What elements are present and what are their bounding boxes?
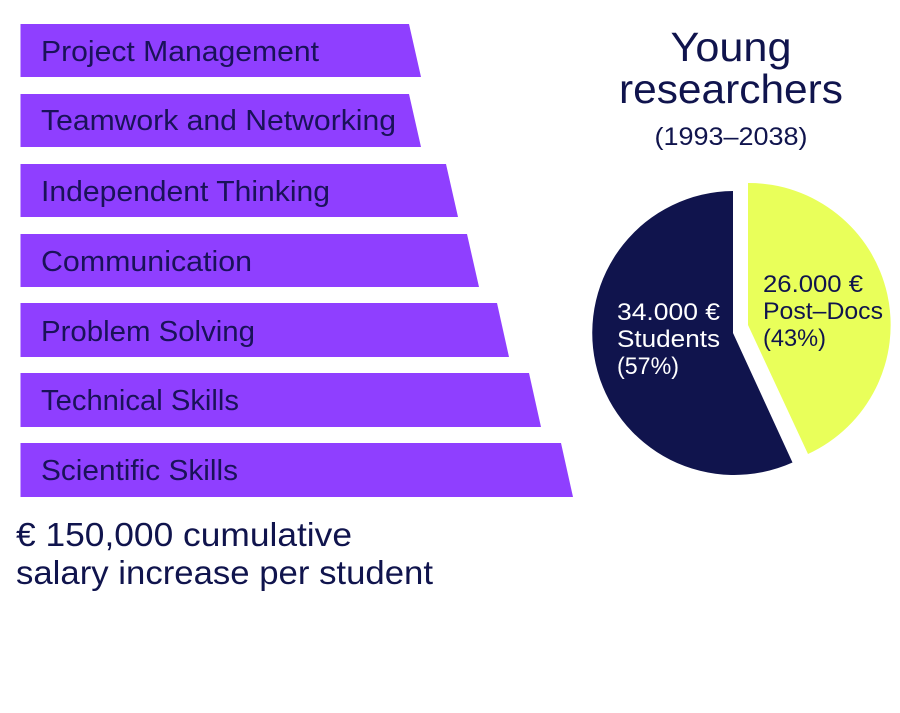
pie slice: students: Students bbox=[617, 326, 720, 353]
bar: Project Management: Project Management bbox=[41, 36, 319, 68]
title: Young researchers: Young bbox=[670, 24, 792, 70]
pie slice: post-docs bbox=[748, 183, 891, 454]
bar: Scientific Skills bbox=[20, 443, 573, 497]
bar: Technical Skills: Technical Skills bbox=[41, 385, 239, 417]
bar: Technical Skills bbox=[20, 373, 541, 427]
pie chart: young researchers bbox=[592, 183, 891, 475]
pie slice: students bbox=[592, 191, 792, 475]
bar: Scientific Skills: Scientific Skills bbox=[41, 455, 238, 487]
bar: Teamwork and Networking: Teamwork and Networking bbox=[41, 105, 396, 137]
text block: salary increase: € 150,000 cumulative bbox=[16, 516, 352, 553]
bar: Independent Thinking: Independent Thinking bbox=[41, 176, 330, 208]
pie slice: students: (57%) bbox=[617, 353, 679, 380]
pie slice: post-docs: (43%) bbox=[763, 325, 826, 352]
panel: skills pyramid bbox=[20, 24, 573, 497]
bar: Teamwork and Networking bbox=[20, 94, 421, 147]
pie slice: students: 34.000 € bbox=[617, 299, 721, 326]
pie slice: post-docs: Post–Docs bbox=[763, 298, 883, 325]
bar: Problem Solving bbox=[20, 303, 509, 357]
pie slice: post-docs: 26.000 € bbox=[763, 271, 864, 298]
text block: salary increase: salary increase per student bbox=[16, 554, 433, 591]
title: Young researchers: (1993–2038) bbox=[654, 123, 808, 151]
title: Young researchers bbox=[619, 24, 843, 151]
bar: Communication: Communication bbox=[41, 246, 252, 278]
bar: Problem Solving: Problem Solving bbox=[41, 316, 255, 348]
title: Young researchers: researchers bbox=[619, 66, 843, 112]
bar: Project Management bbox=[20, 24, 421, 77]
bar: Communication bbox=[20, 234, 479, 287]
bar: Independent Thinking bbox=[20, 164, 458, 217]
text block: salary increase bbox=[16, 516, 433, 591]
